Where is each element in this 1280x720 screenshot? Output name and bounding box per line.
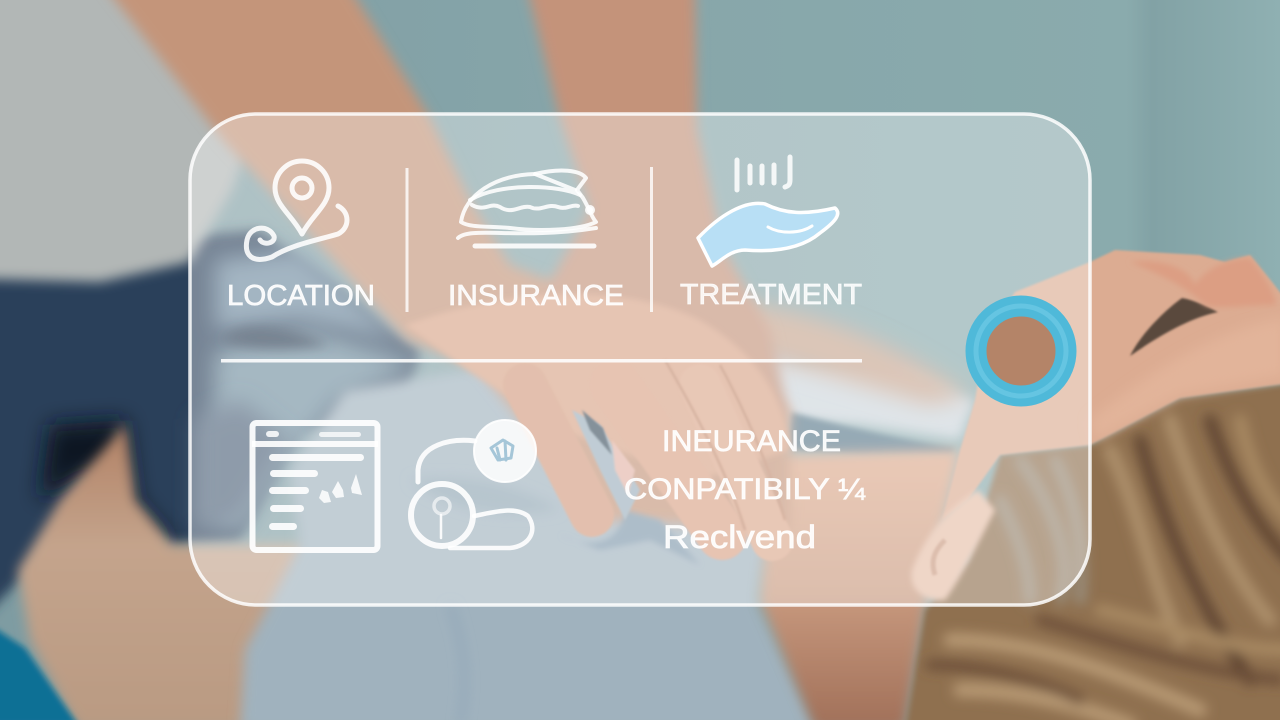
patient ear shadow: [933, 540, 945, 575]
patient eyelashes: [1130, 298, 1218, 356]
icon: document window: [252, 423, 378, 550]
finger two: [615, 385, 722, 535]
icon: location pin with trail: [246, 161, 347, 259]
patient white collar: [770, 360, 975, 440]
blue ring marker: [976, 306, 1066, 396]
therapist hand back: [405, 294, 790, 480]
label: location: LOCATION: [227, 280, 375, 312]
column divider one: [406, 168, 408, 312]
blurred far arm: [700, 300, 970, 405]
therapist forearm one: [100, 0, 790, 530]
line one: INEURANCE: [662, 425, 841, 458]
finger crease lines: [665, 360, 785, 530]
icon: stethoscope: [411, 420, 536, 548]
jeans lower panel shade: [195, 400, 290, 530]
patient hair: [905, 383, 1280, 720]
teal table: [0, 625, 78, 720]
panel surface: [190, 114, 1090, 605]
patient shirt fold: [450, 605, 464, 720]
label: insurance: INSURANCE: [448, 280, 624, 312]
icon: hand with signal bars: [698, 157, 838, 266]
jeans light folds inside panel: [210, 330, 420, 530]
gap shadow: [582, 410, 612, 455]
shadow under fingers: [560, 510, 700, 565]
finger one: [525, 385, 592, 515]
column divider two: [650, 167, 653, 312]
icon: insurance mattress shell: [458, 171, 596, 246]
patient nose and brow: [1130, 258, 1276, 307]
patient neck and chest: [760, 450, 960, 720]
horizontal divider: [221, 359, 862, 362]
jeans dark smudge: [220, 327, 330, 349]
label: treatment: TREATMENT: [680, 279, 862, 311]
patient shoulder shadow: [790, 412, 955, 455]
line three: Reclvend: [663, 519, 816, 555]
hair streaks: [930, 420, 1280, 720]
glass panel: [190, 114, 1090, 605]
line two: CONPATIBILY ¼: [624, 473, 866, 506]
patient ear: [911, 490, 995, 600]
therapist grey shirt: [0, 0, 250, 282]
therapist jeans: [0, 230, 420, 640]
jeans upper lighter area: [215, 250, 400, 340]
patient shirt shadow band: [410, 477, 560, 514]
pink fingertip between fingers: [612, 440, 635, 495]
gap showing shirt between fingers: [572, 410, 640, 520]
therapist forearm two: [525, 0, 790, 420]
finger three: [700, 385, 772, 540]
left lower arm: [18, 425, 310, 720]
text block: insurance compatibility: [624, 425, 866, 555]
patient face: [942, 250, 1280, 520]
jeans shadow: [40, 420, 175, 545]
patient shirt: [240, 345, 818, 720]
patient cheek highlight: [1090, 318, 1280, 440]
